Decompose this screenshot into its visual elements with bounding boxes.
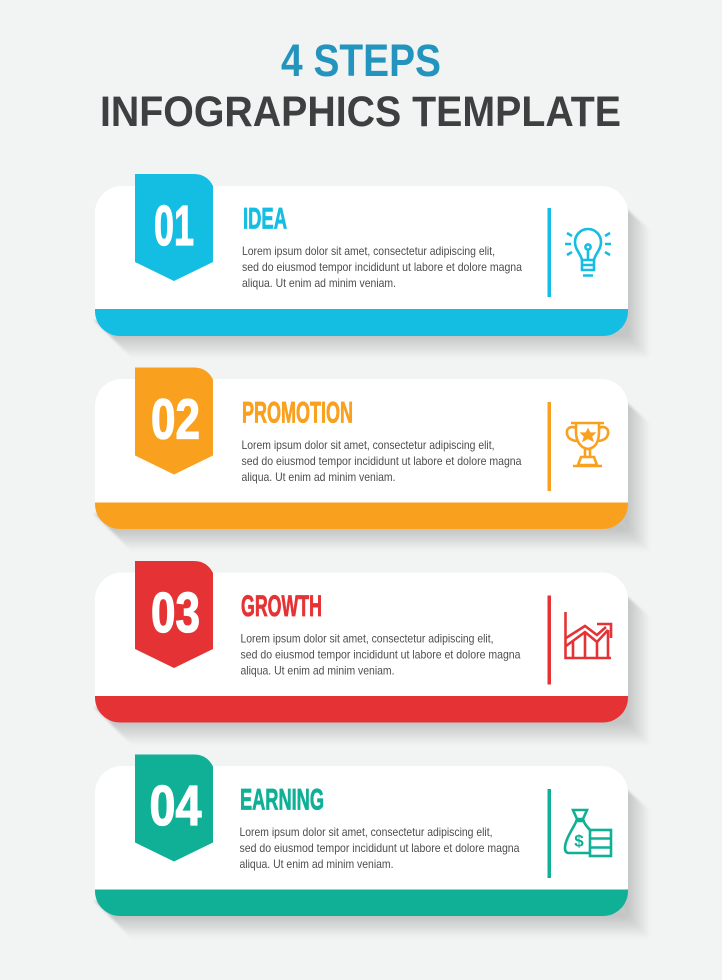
number: 04 bbox=[150, 774, 202, 838]
body text: sed do eiusmod tempor incididunt ut labore et dolore magna bbox=[240, 841, 520, 855]
body text: aliqua. Ut enim ad minim veniam. bbox=[242, 470, 396, 484]
body text: Lorem ipsum dolor sit amet, consectetur adipiscing elit, bbox=[242, 438, 494, 452]
color bar bbox=[95, 696, 628, 722]
body text: sed do eiusmod tempor incididunt ut labore et dolore magna bbox=[240, 648, 521, 662]
heading: IDEA bbox=[243, 202, 287, 236]
heading: GROWTH bbox=[241, 590, 322, 623]
body text: aliqua. Ut enim ad minim veniam. bbox=[242, 276, 396, 290]
number ribbon bbox=[135, 561, 213, 668]
icon: light bulb bbox=[565, 229, 611, 276]
body text: Lorem ipsum dolor sit amet, consectetur adipiscing elit, bbox=[240, 825, 492, 839]
panel: step 01 idea bbox=[94, 174, 650, 358]
number ribbon bbox=[135, 754, 213, 862]
vertical divider bbox=[548, 789, 551, 878]
panel: step 02 promotion bbox=[94, 368, 650, 552]
color bar bbox=[95, 309, 628, 336]
body text bbox=[240, 825, 520, 871]
body text: aliqua. Ut enim ad minim veniam. bbox=[240, 664, 394, 678]
heading: EARNING bbox=[240, 784, 324, 816]
body text: sed do eiusmod tempor incididunt ut labore et dolore magna bbox=[242, 454, 522, 468]
icon: money bag and coins bbox=[565, 810, 611, 856]
body text bbox=[242, 438, 522, 484]
vertical divider bbox=[548, 208, 551, 297]
body text: sed do eiusmod tempor incididunt ut labore et dolore magna bbox=[242, 260, 522, 274]
vertical divider bbox=[548, 402, 551, 491]
icon: growth chart bbox=[566, 612, 611, 658]
body text bbox=[240, 632, 521, 678]
number: 02 bbox=[151, 388, 200, 452]
panel: step 04 earning bbox=[94, 754, 650, 938]
icon: trophy bbox=[567, 423, 608, 466]
color bar bbox=[95, 502, 628, 529]
color bar bbox=[95, 890, 628, 916]
number: 01 bbox=[154, 194, 194, 258]
body text: Lorem ipsum dolor sit amet, consectetur adipiscing elit, bbox=[242, 244, 495, 258]
title bbox=[100, 35, 621, 136]
body text: aliqua. Ut enim ad minim veniam. bbox=[240, 857, 394, 871]
title line: 4 steps: 4 STEPS bbox=[281, 35, 441, 86]
body text bbox=[242, 244, 522, 290]
body text: Lorem ipsum dolor sit amet, consectetur adipiscing elit, bbox=[240, 632, 494, 646]
number: 03 bbox=[151, 581, 200, 645]
panel: step 03 growth bbox=[94, 561, 650, 745]
heading: PROMOTION bbox=[242, 396, 353, 430]
number ribbon bbox=[135, 174, 213, 281]
vertical divider bbox=[548, 596, 551, 684]
icon: money bag and coins: $ bbox=[574, 832, 584, 850]
number ribbon bbox=[135, 368, 213, 474]
title line: infographics template: INFOGRAPHICS TEMPLATE bbox=[100, 89, 621, 136]
